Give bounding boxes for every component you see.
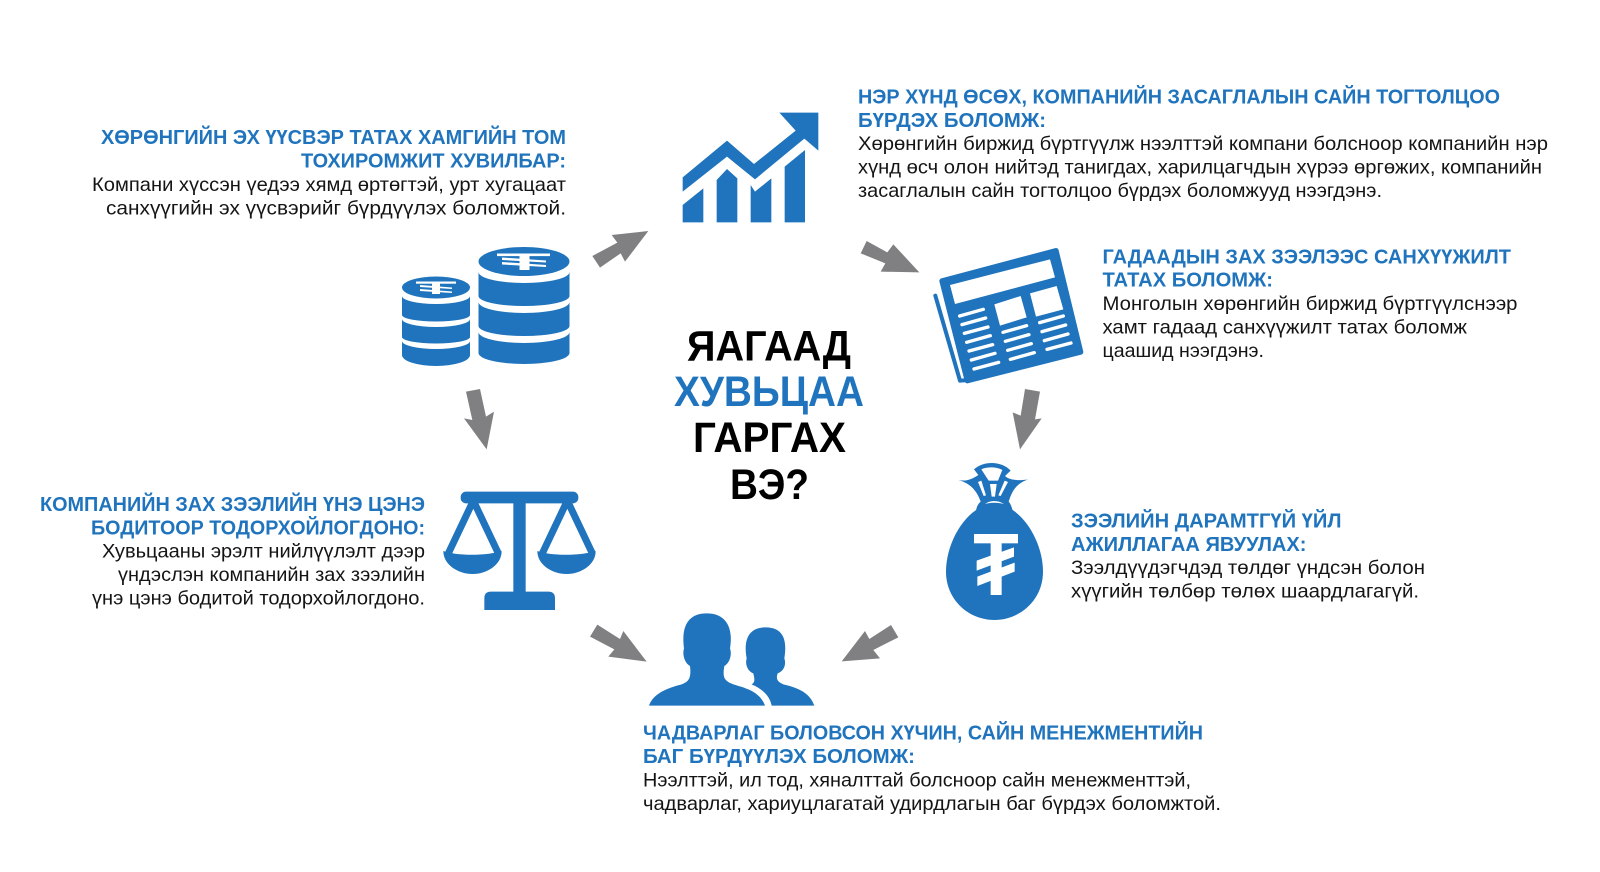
heading: management team: БАГ БҮРДҮҮЛЭХ БОЛОМЖ: bbox=[643, 746, 915, 768]
heading: capital source bbox=[101, 125, 566, 172]
text: capital source bbox=[92, 174, 566, 219]
heading: management team bbox=[643, 720, 1203, 768]
panel: capital source bbox=[92, 125, 566, 219]
arrow: scale to people bbox=[590, 625, 647, 662]
icon: balance scale bbox=[443, 492, 596, 610]
title bbox=[674, 322, 864, 509]
text: management team: Нээлттэй, ил тод, хяналттай болсноор сайн менежменттэй, bbox=[643, 770, 1191, 792]
arrow: coins to scale bbox=[464, 389, 494, 449]
heading: no loan pressure: ЗЭЭЛИЙН ДАРАМТГҮЙ ҮЙЛ bbox=[1071, 508, 1342, 532]
heading: foreign financing: ТАТАХ БОЛОМЖ: bbox=[1102, 270, 1273, 292]
text: management team: чадварлаг, хариуцлагатай удирдлагын баг бүрдэх боломжтой. bbox=[643, 793, 1221, 815]
heading: foreign financing bbox=[1102, 246, 1511, 292]
text: market value bbox=[92, 540, 425, 609]
small coin stack bbox=[402, 276, 470, 366]
heading: no loan pressure bbox=[1071, 508, 1342, 556]
text: management team bbox=[643, 770, 1221, 815]
heading: market value: КОМПАНИЙН ЗАХ ЗЭЭЛИЙН ҮНЭ ЦЭНЭ bbox=[40, 492, 425, 516]
panel: market value bbox=[40, 492, 425, 609]
big coin stack bbox=[478, 247, 570, 364]
panel: no loan pressure bbox=[1071, 508, 1425, 603]
text: foreign financing: цаашид нээгдэнэ. bbox=[1102, 340, 1264, 362]
icon: coin stacks bbox=[402, 247, 570, 366]
heading: foreign financing: ГАДААДЫН ЗАХ ЗЭЭЛЭЭС САНХҮҮЖИЛТ bbox=[1102, 246, 1511, 268]
text: market value: Хувьцааны эрэлт нийлүүлэлт дээр bbox=[102, 540, 425, 562]
arrow: coins to chart bbox=[592, 231, 648, 268]
heading: reputation and governance: НЭР ХҮНД ӨСӨХ, КОМПАНИЙН ЗАСАГЛАЛЫН САЙН ТОГТОЛЦОО bbox=[858, 84, 1500, 108]
text: reputation and governance: Хөрөнгийн биржид бүртгүүлж нээлттэй компани болсноор компанийн нэр bbox=[858, 133, 1548, 155]
icon: growth chart bbox=[683, 113, 818, 222]
text: foreign financing bbox=[1102, 293, 1518, 362]
text: reputation and governance: засаглалын сайн тогтолцоо бүрдэх боломжууд нээгдэнэ. bbox=[858, 180, 1382, 202]
panel: reputation and governance bbox=[858, 84, 1548, 202]
text: market value: үндэслэн компанийн зах зээлийн bbox=[118, 564, 425, 586]
text: no loan pressure bbox=[1071, 557, 1425, 603]
text: no loan pressure: хүүгийн төлбөр төлөх шаардлагагүй. bbox=[1071, 581, 1419, 603]
text: foreign financing: хамт гадаад санхүүжилт татах боломж bbox=[1102, 316, 1467, 338]
arrow: money bag to people bbox=[842, 625, 898, 661]
title: ВЭ? bbox=[730, 461, 809, 509]
heading: capital source: ХӨРӨНГИЙН ЭХ ҮҮСВЭР ТАТАХ ХАМГИЙН ТОМ bbox=[101, 125, 566, 149]
heading: capital source: ТОХИРОМЖИТ ХУВИЛБАР: bbox=[301, 150, 566, 172]
icon: people bbox=[649, 613, 814, 706]
heading: reputation and governance bbox=[858, 84, 1500, 132]
text: foreign financing: Монголын хөрөнгийн биржид бүртгүүлснээр bbox=[1102, 293, 1518, 315]
title: ГАРГАХ bbox=[693, 414, 846, 462]
arrow: newspaper to money bag bbox=[1013, 389, 1042, 449]
arrow: chart to newspaper bbox=[861, 241, 919, 272]
title: ЯАГААД bbox=[687, 322, 851, 370]
text: market value: үнэ цэнэ бодитой тодорхойлогдоно. bbox=[92, 587, 425, 609]
heading: reputation and governance: БҮРДЭХ БОЛОМЖ: bbox=[858, 110, 1046, 132]
text: reputation and governance: хүнд өсч олон нийтэд танигдах, харилцагчдын хүрээ өргөжих, компанийн bbox=[858, 156, 1542, 178]
heading: market value bbox=[40, 492, 425, 539]
heading: market value: БОДИТООР ТОДОРХОЙЛОГДОНО: bbox=[91, 515, 425, 539]
text: capital source: Компани хүссэн үедээ хямд өртөгтэй, урт хугацаат bbox=[92, 174, 566, 196]
panel: management team bbox=[643, 720, 1221, 815]
heading: no loan pressure: АЖИЛЛАГАА ЯВУУЛАХ: bbox=[1071, 534, 1306, 556]
title: ХУВЬЦАА bbox=[674, 368, 864, 416]
text: reputation and governance bbox=[858, 133, 1548, 202]
icon: money bag bbox=[946, 463, 1043, 620]
text: no loan pressure: Зээлдүүдэгчдэд төлдөг үндсэн болон bbox=[1071, 557, 1425, 579]
heading: management team: ЧАДВАРЛАГ БОЛОВСОН ХҮЧИН, САЙН МЕНЕЖМЕНТИЙН bbox=[643, 720, 1203, 744]
icon: newspaper bbox=[935, 251, 1081, 381]
text: capital source: санхүүгийн эх үүсвэрийг бүрдүүлэх боломжтой. bbox=[106, 197, 566, 219]
panel: foreign financing bbox=[1102, 246, 1518, 362]
